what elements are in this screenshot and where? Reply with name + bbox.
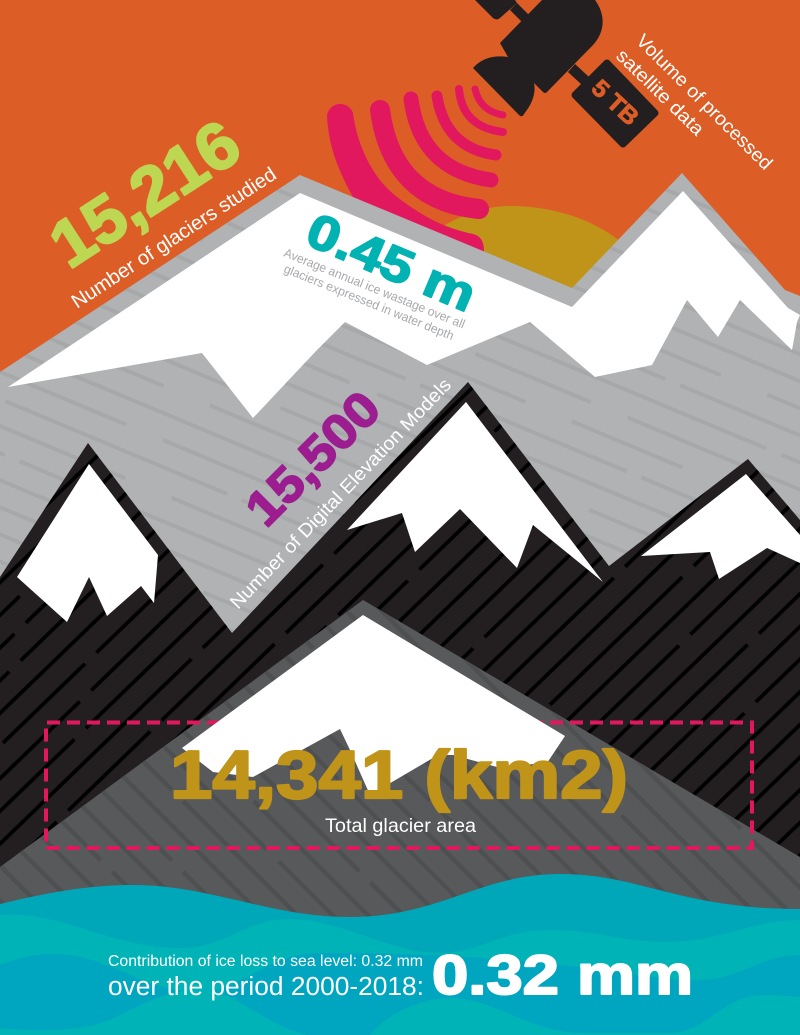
caption ice wastage: Average annual ice wastage over all [282, 246, 467, 331]
value 5 TB: 5 TB [586, 75, 644, 131]
value 0.45 m: 0.45 m [299, 203, 484, 323]
signal waves [327, 89, 503, 252]
satellite panel [475, 0, 517, 20]
data box [575, 63, 655, 144]
value 15,500: 15,500 [236, 381, 391, 537]
caption glaciers studied: Number of glaciers studied [68, 163, 281, 313]
caption glacier area: Total glacier area [325, 815, 476, 837]
black mountain range [0, 382, 800, 1035]
wave back [0, 874, 800, 1035]
dark grey foreground mountain [0, 600, 800, 1035]
dark mountain snow [182, 615, 565, 795]
dashed highlight frame [46, 722, 752, 848]
grey mountain texture [0, 173, 800, 640]
left peak snow [17, 464, 158, 622]
satellite arm [510, 3, 529, 22]
dark mountain body [0, 600, 800, 1035]
wave teal [0, 915, 800, 1035]
value 15,216: 15,216 [36, 105, 253, 282]
stat: sea level contribution [108, 943, 693, 1006]
sea waves [0, 874, 800, 1035]
satellite [473, 0, 655, 144]
stat: ice wastage [282, 203, 484, 343]
sun [430, 206, 625, 300]
light grey mountain range [0, 173, 800, 640]
caption elevation models: Number of Digital Elevation Models [226, 375, 456, 613]
dark mountain texture [0, 600, 800, 1035]
caption satellite data: satellite data [612, 46, 708, 141]
stat: digital elevation models [226, 375, 456, 613]
grey mountain snow [8, 191, 800, 418]
caption line one: Contribution of ice loss to sea level: 0.32 mm [108, 953, 423, 970]
value 14,341 km2: 14,341 (km2) [170, 737, 628, 813]
black mountain texture [0, 382, 800, 1035]
caption ice wastage: glaciers expressed in water depth [282, 262, 456, 343]
wave blue [0, 953, 800, 1035]
satellite lower arm [568, 64, 589, 85]
stat: satellite data [586, 31, 776, 174]
caption satellite data: Volume of processed [631, 31, 776, 174]
grey mountain body [0, 173, 800, 640]
black mountain body [0, 382, 800, 1035]
value 0.32 mm: 0.32 mm [432, 943, 693, 1006]
caption line two: over the period 2000-2018: [108, 973, 424, 1001]
stat: glacier area [170, 737, 628, 837]
satellite body [473, 0, 603, 116]
right peak snow [641, 474, 800, 579]
wave front [0, 990, 800, 1035]
middle peak snow [347, 402, 603, 582]
stat: glaciers studied [36, 105, 281, 313]
